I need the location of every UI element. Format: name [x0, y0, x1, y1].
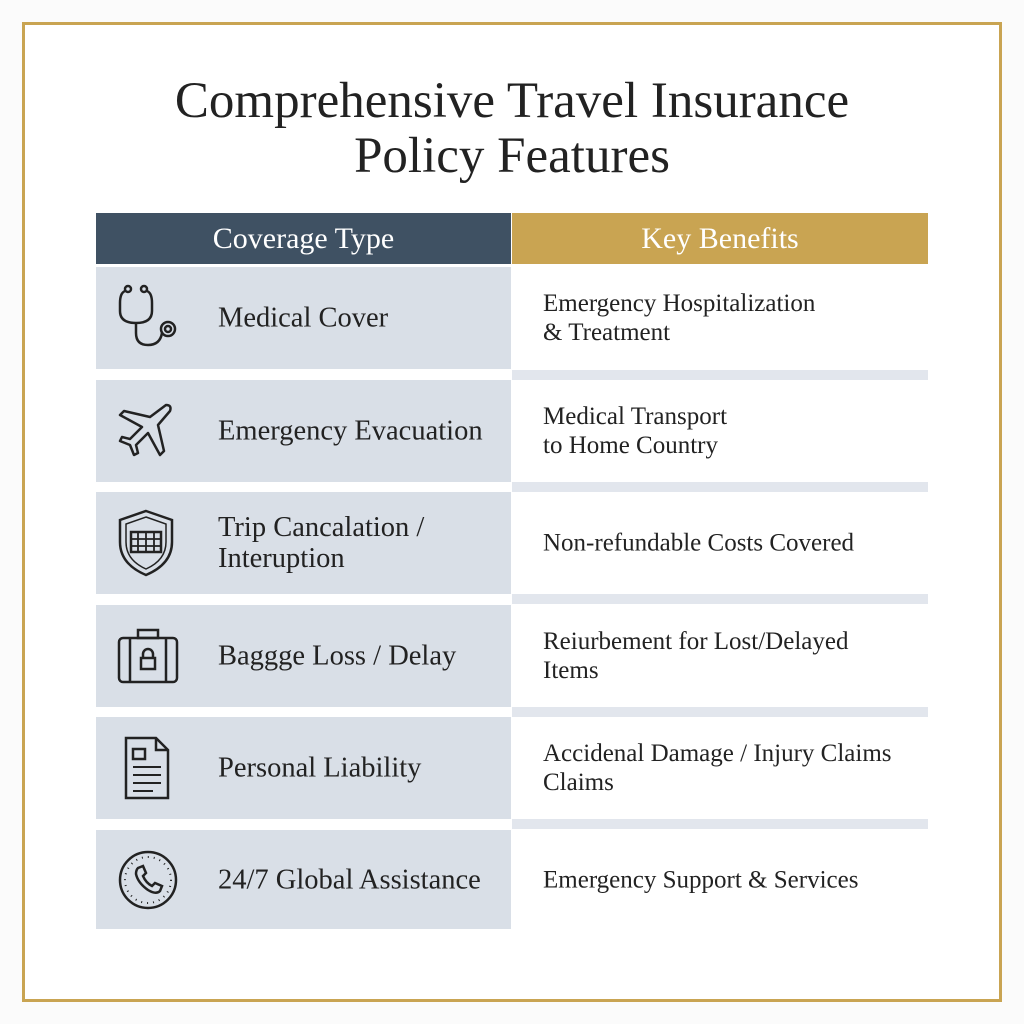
label: Interuption: [218, 543, 345, 574]
benefit: Emergency Support & Services: [543, 866, 858, 893]
label: Baggge Loss / Delay: [218, 640, 456, 672]
icon: plane: [118, 404, 172, 456]
label: Personal Liability: [218, 752, 421, 784]
row: assistance: [96, 830, 858, 929]
label: 24/7 Global Assistance: [218, 864, 481, 895]
title: Policy Features: [354, 128, 670, 184]
icon: phone clock: [118, 850, 178, 910]
row: trip cancellation: [96, 492, 854, 594]
benefit: Non-refundable Costs Covered: [543, 530, 854, 556]
header: coverage type: [96, 213, 511, 264]
benefit: & Treatment: [543, 319, 670, 346]
header: coverage type: Coverage Type: [213, 222, 394, 255]
benefit: [543, 740, 892, 796]
icon: document: [124, 736, 170, 800]
icon: suitcase lock: [118, 628, 178, 684]
icon: stethoscope: [118, 284, 176, 346]
header: key benefits: [512, 213, 928, 264]
row: baggage: [96, 605, 848, 707]
benefit: [543, 403, 727, 459]
benefit: Medical Transport: [543, 403, 727, 430]
title: [175, 73, 849, 184]
benefit: [543, 290, 815, 346]
benefit: Emergency Hospitalization: [543, 290, 815, 317]
row: medical cover: [96, 267, 815, 369]
benefit: Items: [543, 657, 599, 684]
benefit: [543, 628, 848, 684]
label: Emergency Evacuation: [218, 416, 483, 446]
icon: shield grid: [118, 510, 174, 576]
row: liability: [96, 717, 892, 819]
benefit: Accidenal Damage / Injury Claims: [543, 740, 892, 767]
benefit: to Home Country: [543, 432, 718, 459]
header: key benefits: Key Benefits: [641, 222, 799, 255]
benefit: Reiurbement for Lost/Delayed: [543, 628, 848, 655]
label: Trip Cancalation /: [218, 512, 424, 543]
row: evacuation: [96, 380, 727, 482]
benefit: Claims: [543, 769, 614, 796]
label: [218, 512, 424, 574]
title: Comprehensive Travel Insurance: [175, 73, 849, 129]
label: Medical Cover: [218, 302, 388, 334]
